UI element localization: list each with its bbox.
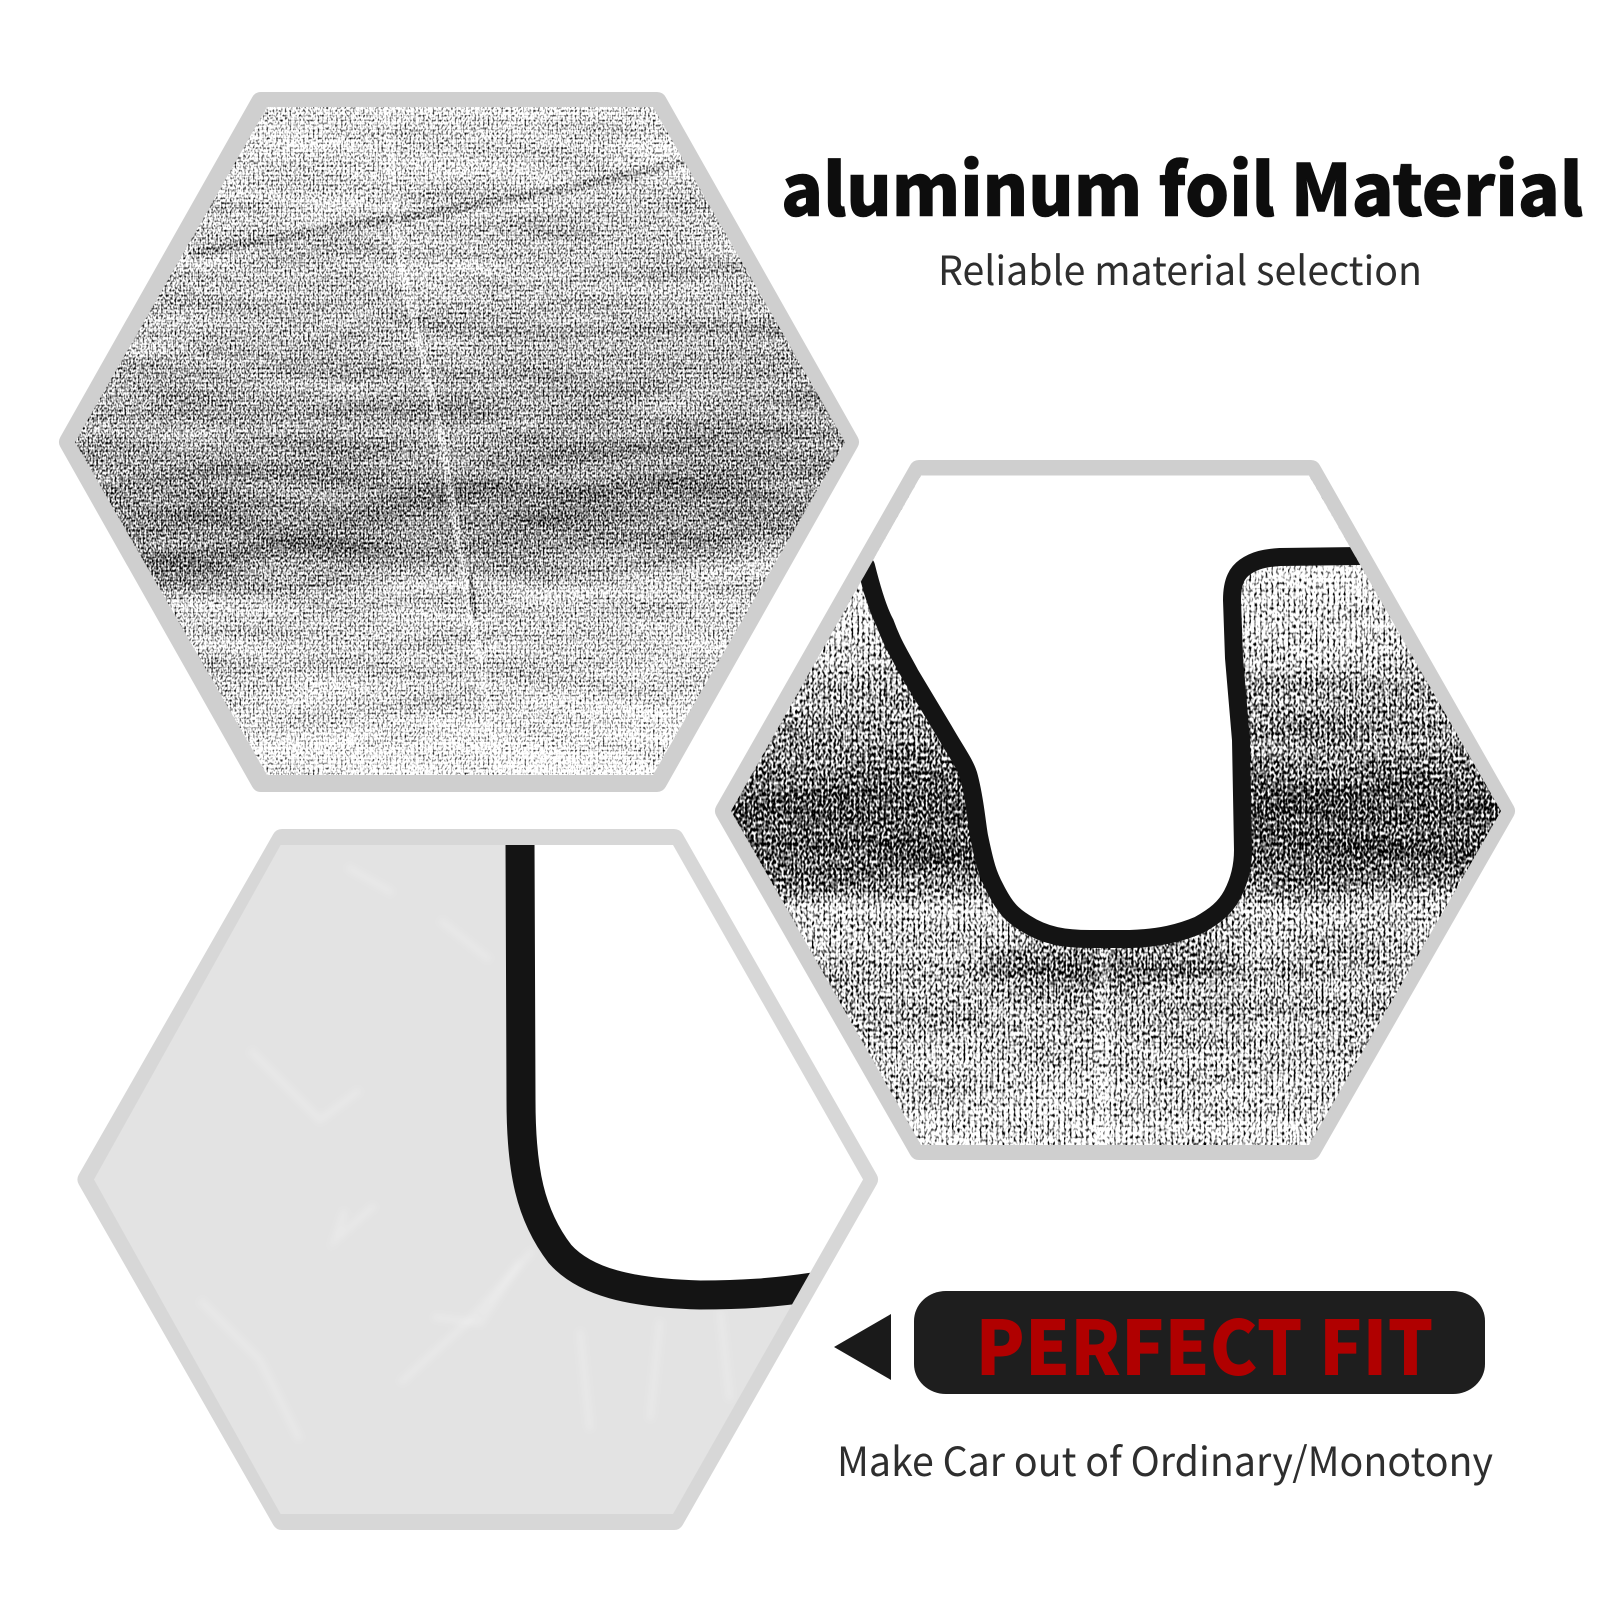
foil photo with cut-out and binding [731, 476, 1501, 1145]
black binding edge [866, 556, 1360, 939]
light fabric surface [94, 845, 792, 1514]
caption: Make Car out of Ordinary/Monotony [837, 1430, 1493, 1488]
fabric creases [200, 867, 730, 1440]
foil texture [731, 476, 1501, 1145]
hexagon frame [725, 470, 1505, 1150]
white cut-out [534, 845, 863, 1280]
badge text: PERFECT FIT [976, 1288, 1434, 1397]
hexagon frame [69, 102, 849, 782]
panel: foil with U-shaped cut-out hexagon [700, 450, 1530, 1170]
arrow pointing to the hexagon [834, 1314, 891, 1380]
callout: perfect fit badge [914, 1288, 1485, 1397]
title: aluminum foil Material [781, 132, 1583, 237]
black binding edge [520, 840, 820, 1295]
foil photo texture with horizontal bands and seam [75, 107, 845, 775]
fabric photo with binding [80, 840, 900, 1520]
subtitle: Reliable material selection [938, 239, 1422, 297]
badge background [914, 1291, 1485, 1394]
panel: silver back side hexagon [80, 839, 900, 1520]
panel: foil texture hexagon [40, 70, 880, 810]
hexagon frame [88, 839, 868, 1520]
white cut-out [850, 470, 1360, 939]
